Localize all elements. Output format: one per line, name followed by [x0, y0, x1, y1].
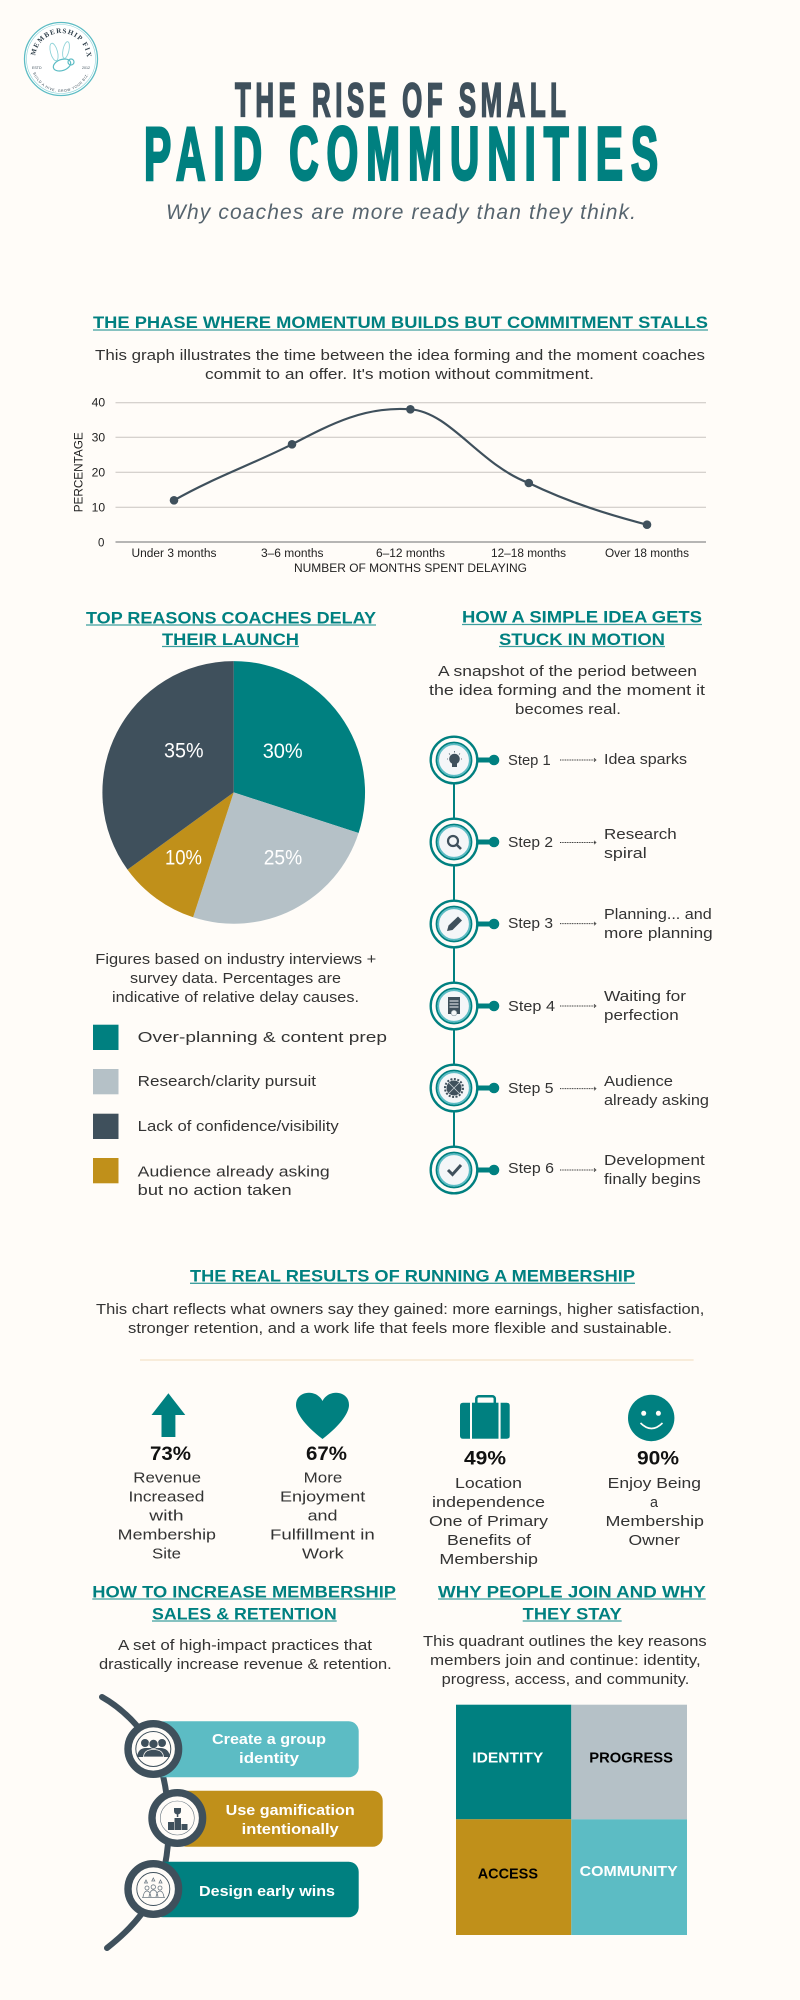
intro text: results	[96, 1301, 704, 1337]
note text: figures: indicative of relative delay causes.	[112, 989, 359, 1006]
bar: use gamification intentionally: intentionally	[242, 1821, 339, 1838]
line chart: 3–6 months	[261, 548, 324, 560]
intro text: quadrant	[423, 1633, 707, 1688]
line chart: 40	[92, 398, 105, 410]
panel: real results	[96, 1267, 704, 1568]
stat: 90% owner: Owner	[628, 1532, 680, 1549]
intro text: results: This chart reflects what owners say they gained: more earnings, higher satisfaction,	[96, 1301, 704, 1318]
icon: stars and people	[142, 1878, 165, 1898]
logo: Membership Fix badge: 2012	[82, 66, 90, 70]
step 4	[431, 983, 686, 1029]
legend: Research/clarity pursuit	[138, 1073, 317, 1090]
stat: 73% revenue: Membership	[118, 1527, 216, 1544]
icon: network gear	[445, 1079, 463, 1097]
stat: 67% enjoyment: Fulfillment in	[270, 1527, 375, 1544]
title: PAID COMMUNITIES	[144, 111, 658, 195]
stat: 73% revenue: Revenue	[133, 1470, 201, 1487]
step 5: Audience	[604, 1073, 673, 1090]
line chart: 6–12 months	[376, 548, 445, 560]
step 3: Planning... and	[604, 906, 712, 923]
icon: pencil	[447, 916, 462, 931]
step 1	[431, 737, 687, 783]
heading: top reasons: THEIR LAUNCH	[162, 630, 299, 649]
heading: top reasons	[86, 608, 377, 649]
step 5	[431, 1065, 709, 1111]
heading: stuck in motion	[462, 608, 702, 649]
step 6	[431, 1147, 706, 1193]
quadrant: progress: PROGRESS	[589, 1749, 673, 1766]
stat: 67% enjoyment: Work	[302, 1546, 344, 1563]
stat: 49% location: independence	[432, 1494, 545, 1511]
stat: 73% revenue: 73%	[150, 1444, 191, 1465]
legend: Lack of confidence/visibility	[138, 1118, 339, 1135]
icon: group of people	[137, 1739, 170, 1757]
step 1: Step 1	[508, 752, 551, 769]
pie chart	[102, 661, 365, 924]
step 3	[431, 901, 713, 947]
intro text: results: stronger retention, and a work life that feels more flexible and sustainable.	[128, 1320, 672, 1337]
panel: increase sales and retention	[92, 1582, 396, 1948]
step 3: Step 3	[508, 915, 553, 932]
line chart: 10	[92, 502, 105, 514]
heading: top reasons: TOP REASONS COACHES DELAY	[86, 608, 377, 628]
line chart: 20	[92, 468, 105, 480]
icon: suitcase	[460, 1396, 510, 1439]
heading: increase sales	[92, 1582, 396, 1623]
quadrant: access	[456, 1819, 571, 1935]
step 6: Development	[604, 1152, 706, 1169]
legend: Over-planning & content prep	[138, 1029, 387, 1046]
curved spine	[102, 1697, 169, 1948]
heading: stuck in motion: HOW A SIMPLE IDEA GETS	[462, 608, 702, 627]
stat: 49% location: One of Primary	[429, 1513, 549, 1530]
heading: momentum: THE PHASE WHERE MOMENTUM BUILDS BUT COMMITMENT STALLS	[93, 313, 708, 332]
step 2: spiral	[604, 845, 647, 862]
step 5: Step 5	[508, 1080, 554, 1097]
heading: increase sales: SALES & RETENTION	[152, 1604, 337, 1623]
quadrant chart	[456, 1705, 687, 1935]
heading: why people join	[438, 1582, 706, 1623]
bar: create a group identity: identity	[239, 1750, 300, 1767]
stat: 90% owner: 90%	[637, 1449, 679, 1470]
step 5: already asking	[604, 1092, 709, 1109]
heading: real results: THE REAL RESULTS OF RUNNING A MEMBERSHIP	[190, 1267, 635, 1286]
stat: 73% revenue: with	[148, 1508, 184, 1525]
intro text: practices: drastically increase revenue & retention.	[99, 1656, 392, 1673]
intro text: line chart: This graph illustrates the time between the idea forming and the moment coaches	[95, 347, 705, 364]
logo: Membership Fix badge: MEMBERSHIP FIX	[30, 28, 92, 58]
icon: heart	[296, 1393, 349, 1439]
stat: 67% enjoyment: 67%	[306, 1444, 347, 1465]
stat: 73% revenue: Site	[152, 1546, 181, 1563]
intro text: snapshot: the idea forming and the moment it	[429, 682, 706, 699]
bar: use gamification intentionally	[152, 1791, 383, 1847]
line chart: Under 3 months	[132, 548, 217, 560]
icon: document with badge	[448, 997, 460, 1016]
intro text: quadrant: progress, access, and community.	[442, 1671, 689, 1688]
bar: create a group identity	[128, 1721, 359, 1777]
pie chart: 30%	[263, 740, 303, 763]
stat: 73% revenue	[118, 1393, 216, 1563]
icon: magnifier	[448, 836, 461, 849]
note text: figures: Figures based on industry interviews +	[95, 951, 377, 968]
step 2: Step 2	[508, 834, 553, 851]
panel: why people join	[423, 1582, 707, 1935]
step 6: finally begins	[604, 1171, 701, 1188]
bar: use gamification intentionally: Use gamification	[226, 1802, 355, 1819]
quadrant: community	[571, 1819, 687, 1935]
line chart: 12–18 months	[491, 548, 566, 560]
panel: steps timeline	[429, 608, 713, 1193]
step 3: more planning	[604, 925, 713, 942]
icon: podium and trophy	[168, 1808, 188, 1830]
line chart: 0	[98, 538, 104, 550]
intro text: snapshot: becomes real.	[515, 701, 621, 718]
line chart: PERCENTAGE	[74, 432, 86, 512]
pie chart: 25%	[264, 847, 302, 870]
quadrant: identity	[456, 1705, 571, 1819]
stat: 90% owner: Membership	[606, 1513, 704, 1530]
stat: 73% revenue: Increased	[128, 1489, 204, 1506]
stat: 67% enjoyment: More	[304, 1470, 342, 1487]
step 6: Step 6	[508, 1160, 554, 1177]
intro text: snapshot: A snapshot of the period between	[438, 663, 697, 680]
title: THE RISE OF SMALL	[235, 74, 566, 128]
title	[144, 74, 658, 195]
legend: Audience already asking	[138, 1164, 330, 1180]
heading: increase sales: HOW TO INCREASE MEMBERSHIP	[92, 1582, 396, 1601]
legend: but no action taken	[138, 1182, 292, 1199]
line chart: NUMBER OF MONTHS SPENT DELAYING	[294, 563, 527, 575]
logo: Membership Fix badge	[24, 22, 98, 96]
stat: 67% enjoyment: Enjoyment	[280, 1489, 366, 1506]
line chart: 30	[92, 432, 105, 444]
note text: figures	[95, 951, 377, 1006]
bar: design early wins	[128, 1862, 359, 1917]
stat: 90% owner	[606, 1395, 704, 1549]
stat: 67% enjoyment	[270, 1393, 375, 1563]
stat: 49% location: 49%	[464, 1449, 506, 1470]
intro text: quadrant: This quadrant outlines the key reasons	[423, 1633, 707, 1650]
panel: top reasons	[86, 608, 387, 1199]
note text: figures: survey data. Percentages are	[130, 970, 341, 987]
step 4: Waiting for	[604, 988, 686, 1005]
stat: 67% enjoyment: and	[308, 1508, 338, 1525]
icon: check mark	[448, 1165, 461, 1174]
intro text: quadrant: members join and continue: identity,	[430, 1652, 701, 1669]
intro text: practices: A set of high-impact practices that	[118, 1637, 373, 1654]
quadrant: access: ACCESS	[478, 1865, 538, 1882]
step 1: Idea sparks	[604, 751, 687, 768]
step 2: Research	[604, 826, 677, 843]
step 4: perfection	[604, 1007, 679, 1024]
pie chart: 10%	[165, 847, 202, 870]
step 2	[431, 819, 677, 865]
quadrant: community: COMMUNITY	[580, 1863, 678, 1880]
icon: smiley	[628, 1395, 674, 1441]
stat: 49% location	[429, 1396, 549, 1568]
stat: 49% location: Benefits of	[447, 1532, 532, 1549]
intro text: practices	[99, 1637, 392, 1673]
legend	[93, 1025, 387, 1199]
icon: light bulb	[447, 751, 462, 767]
step 4: Step 4	[508, 998, 555, 1015]
stat: 49% location: Membership	[439, 1551, 538, 1568]
bar: design early wins: Design early wins	[199, 1883, 335, 1900]
intro text: line chart: commit to an offer. It's motion without commitment.	[205, 366, 594, 383]
quadrant: progress	[571, 1705, 687, 1819]
bar: create a group identity: Create a group	[212, 1731, 326, 1748]
logo: Membership Fix badge: BUILD A HIVE. GROW YOUR BIZ.	[33, 72, 88, 92]
line chart	[74, 398, 706, 575]
heading: stuck in motion: STUCK IN MOTION	[499, 630, 665, 649]
stat: 49% location: Location	[455, 1475, 522, 1492]
heading: why people join: WHY PEOPLE JOIN AND WHY	[438, 1582, 706, 1601]
intro text: line chart	[95, 347, 705, 383]
intro text: snapshot	[429, 663, 706, 718]
pie chart: 35%	[164, 740, 204, 762]
line chart: Over 18 months	[605, 548, 689, 560]
panel: line chart section	[74, 313, 708, 575]
stat: 90% owner: a	[650, 1494, 659, 1511]
stat: 90% owner: Enjoy Being	[608, 1475, 701, 1492]
logo: Membership Fix badge: ESTD	[32, 66, 42, 70]
heading: why people join: THEY STAY	[523, 1604, 622, 1623]
quadrant: identity: IDENTITY	[472, 1749, 543, 1766]
subtitle: Why coaches are more ready than they think.	[166, 201, 636, 224]
icon: up arrow	[152, 1393, 185, 1437]
